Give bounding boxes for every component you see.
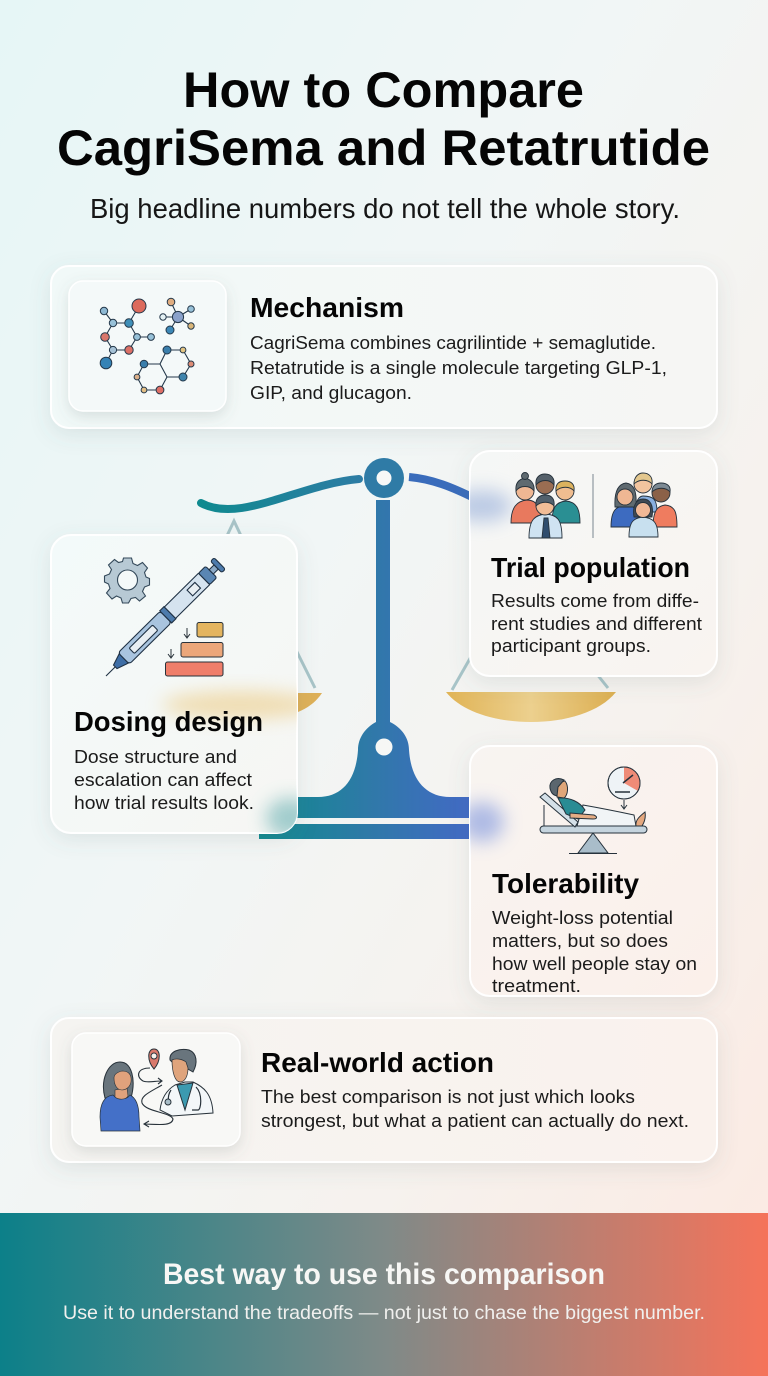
body: trial population: participant groups. — [491, 635, 651, 656]
icon: patient on balance with gauge — [540, 767, 647, 854]
body: mechanism: Retatrutide is a single molecule targeting GLP-1, — [250, 357, 667, 378]
body: tolerability: Weight-loss potential — [492, 907, 673, 928]
body: trial population: Results come from diffe- — [491, 590, 699, 611]
body: mechanism — [250, 332, 667, 403]
heading: dosing design: Dosing design — [74, 706, 263, 737]
panel: dosing design — [51, 535, 318, 838]
balance scale — [201, 458, 616, 839]
footer text: Use it to understand the tradeoffs — not just to chase the biggest number. — [63, 1302, 705, 1324]
body: tolerability — [492, 907, 697, 996]
panel: trial population — [452, 451, 717, 676]
left pan — [240, 693, 322, 718]
heading: trial population: Trial population — [491, 552, 690, 583]
body: dosing design: how trial results look. — [74, 792, 254, 813]
scale post and base — [259, 500, 480, 818]
heading: real-world action: Real-world action — [261, 1047, 494, 1078]
body: mechanism: CagriSema combines cagrilintide + semaglutide. — [250, 332, 656, 353]
title — [57, 62, 710, 176]
body: dosing design: Dose structure and — [74, 746, 237, 767]
panel: real-world action — [51, 1018, 717, 1162]
body: dosing design: escalation can affect — [74, 769, 252, 790]
icon: gear — [104, 558, 150, 603]
panel: mechanism — [51, 266, 717, 428]
body: tolerability: matters, but so does — [492, 930, 668, 951]
heading: tolerability: Tolerability — [492, 868, 639, 899]
scale beam — [201, 477, 476, 509]
panel: tolerability — [460, 746, 717, 996]
body: real-world action: The best comparison is not just which looks — [261, 1086, 635, 1107]
title: How to Compare — [183, 62, 584, 118]
icon: step-down dose bars — [166, 622, 223, 676]
icon: injection pen — [100, 557, 226, 682]
right pan — [446, 692, 616, 722]
icon: two participant groups — [511, 472, 677, 538]
body: real-world action — [261, 1086, 689, 1131]
title: CagriSema and Retatrutide — [57, 120, 710, 176]
footer banner — [0, 1213, 768, 1376]
icon tile: patient and doctor — [72, 1033, 240, 1146]
scale hangers — [225, 521, 608, 690]
body: tolerability: treatment. — [492, 975, 581, 996]
heading: mechanism: Mechanism — [250, 292, 404, 323]
body: trial population — [491, 590, 702, 656]
body: trial population: rent studies and different — [491, 613, 702, 634]
subtitle: Big headline numbers do not tell the whole story. — [90, 193, 680, 224]
footer heading: Best way to use this comparison — [163, 1258, 605, 1291]
body: dosing design — [74, 746, 254, 813]
body: tolerability: how well people stay on — [492, 953, 697, 974]
scale pivot — [364, 458, 404, 498]
body: real-world action: strongest, but what a patient can actually do next. — [261, 1110, 689, 1131]
icon tile: molecules — [69, 281, 226, 411]
body: mechanism: GIP, and glucagon. — [250, 382, 412, 403]
